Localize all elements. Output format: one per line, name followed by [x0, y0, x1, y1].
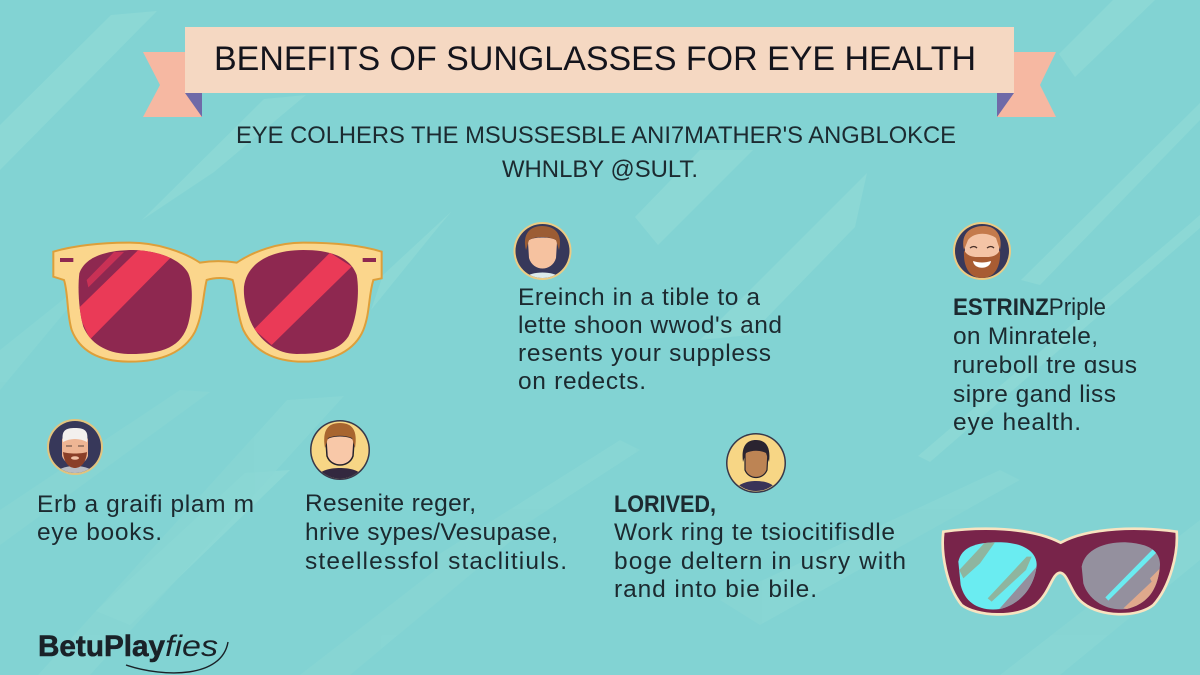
avatar: top centre person — [514, 222, 572, 280]
text block: bottom centre: Work ring te tsiocitifisdle — [614, 519, 895, 546]
text block: top right: rureboll tre ɑsus — [953, 352, 1137, 379]
subtitle: WHNLBY @SULT. — [502, 156, 698, 183]
logo: fies — [165, 630, 218, 663]
title: BENEFITS OF SUNGLASSES FOR EYE HEALTH — [214, 40, 976, 78]
avatar: bottom centre man — [726, 433, 786, 495]
text block: top right: ESTRINZPriple — [953, 294, 1106, 321]
icon: cat-eye sunglasses — [943, 529, 1177, 614]
text block: bottom left: Erb a graifi plam m — [37, 491, 254, 518]
text block: bottom left — [37, 491, 254, 546]
left ribbon fold — [185, 93, 202, 117]
text block: top centre: lette shoon wwod's and — [518, 312, 782, 339]
avatar: top right bearded man — [953, 222, 1011, 280]
text block: top centre — [518, 284, 782, 395]
text block: top centre: resents your suppless — [518, 340, 771, 367]
text block: bottom left: eye books. — [37, 519, 162, 546]
text block: top right: eye health. — [953, 409, 1081, 436]
ribbon band — [185, 27, 1014, 93]
avatar: bottom left man with white cap — [47, 419, 103, 475]
text block: top right: on Minratele, — [953, 323, 1098, 350]
text block: bottom centre-left: Resenite reger, — [305, 490, 476, 517]
text block: bottom centre: LORIVED, — [614, 491, 716, 518]
avatar: bottom centre-left man — [310, 420, 370, 482]
text block: top centre: on redects. — [518, 368, 646, 395]
title ribbon — [143, 27, 1056, 117]
logo: BetuPlay — [38, 630, 165, 663]
text block: top right: sipre gand liss — [953, 381, 1116, 408]
text block: bottom centre: boge deltern in usry with — [614, 548, 906, 575]
logo — [38, 630, 228, 673]
text block: bottom centre — [614, 491, 906, 603]
right ribbon tail — [997, 52, 1056, 117]
right ribbon fold — [997, 93, 1014, 117]
text block: bottom centre-left: hrive sypes/Vesupase, — [305, 519, 558, 546]
text block: top centre: Ereinch in a tible to a — [518, 284, 760, 311]
subtitle: EYE COLHERS THE MSUSSESBLE ANI7MATHER'S ANGBLOKCE — [236, 122, 956, 149]
text block: top right — [953, 294, 1137, 436]
icon: yellow sunglasses — [53, 243, 382, 362]
text block: bottom centre-left: steellessfol staclitiuls. — [305, 548, 567, 575]
subtitle — [236, 122, 956, 183]
left ribbon tail — [143, 52, 202, 117]
text block: bottom centre: rand into bie bile. — [614, 576, 817, 603]
text block: bottom centre-left — [305, 490, 567, 575]
